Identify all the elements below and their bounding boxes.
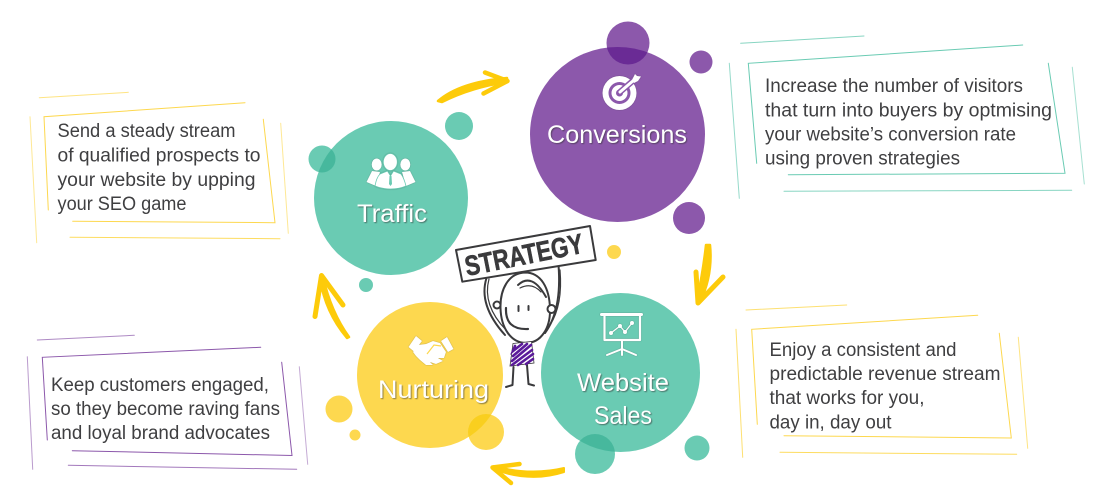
panel: nurturing description	[27, 335, 308, 469]
text: website sales description: Enjoy a consistent and	[770, 340, 956, 361]
panel: website sales description	[736, 305, 1028, 457]
arrow: nurturing to traffic	[315, 276, 349, 338]
text: traffic description: Send a steady stream	[58, 121, 236, 142]
text: traffic description: of qualified prospects to	[58, 146, 260, 166]
label: website sales: Sales	[594, 402, 652, 430]
frame: conversions panel	[729, 36, 1084, 198]
icon: target with dart	[602, 74, 641, 110]
circle: traffic	[308, 112, 473, 292]
label: conversions: Conversions	[547, 121, 687, 149]
sign lettering: STRATEGY	[462, 228, 586, 282]
frame: website sales panel	[736, 305, 1028, 457]
label: website sales: Website	[577, 369, 669, 397]
dot: yellow accent	[607, 245, 621, 259]
text: website sales description: day in, day out	[770, 412, 892, 434]
text: conversions description: using proven strategies	[765, 148, 960, 170]
character: stick figure holding strategy sign	[456, 226, 596, 387]
frame: traffic panel	[30, 92, 288, 243]
icon: business people	[366, 154, 416, 189]
text: conversions description: Increase the number of visitors	[765, 76, 1023, 97]
text: nurturing description: and loyal brand advocates	[51, 423, 270, 444]
arrow: conversions to website sales	[696, 245, 723, 303]
label: nurturing: Nurturing	[378, 376, 489, 404]
circle: website sales	[541, 293, 710, 474]
arms, head and legs	[484, 265, 561, 387]
text: traffic description: your website by upping	[58, 170, 256, 191]
label: traffic: Traffic	[357, 200, 427, 228]
icon: presentation board	[602, 314, 642, 355]
text: conversions description: your website’s conversion rate	[765, 124, 1016, 146]
text: traffic description: your SEO game	[58, 194, 186, 215]
frame: nurturing panel	[27, 335, 308, 469]
text: nurturing description: so they become raving fans	[51, 399, 280, 420]
circle: conversions	[530, 22, 712, 234]
panel: conversions description	[729, 36, 1084, 198]
text: website sales description: that works for you,	[770, 388, 924, 409]
sign: strategy	[456, 226, 596, 282]
arrow: website sales to nurturing	[492, 464, 564, 483]
text: website sales description: predictable revenue stream	[770, 364, 1000, 385]
shirt with purple scribble	[510, 342, 534, 366]
icon: handshake	[408, 336, 454, 365]
circle: nurturing	[326, 302, 504, 450]
panel: traffic description	[30, 92, 288, 243]
arrow: traffic to conversions	[438, 72, 508, 102]
text: conversions description: that turn into buyers by optmising	[765, 100, 1052, 122]
text: nurturing description: Keep customers engaged,	[51, 375, 269, 396]
